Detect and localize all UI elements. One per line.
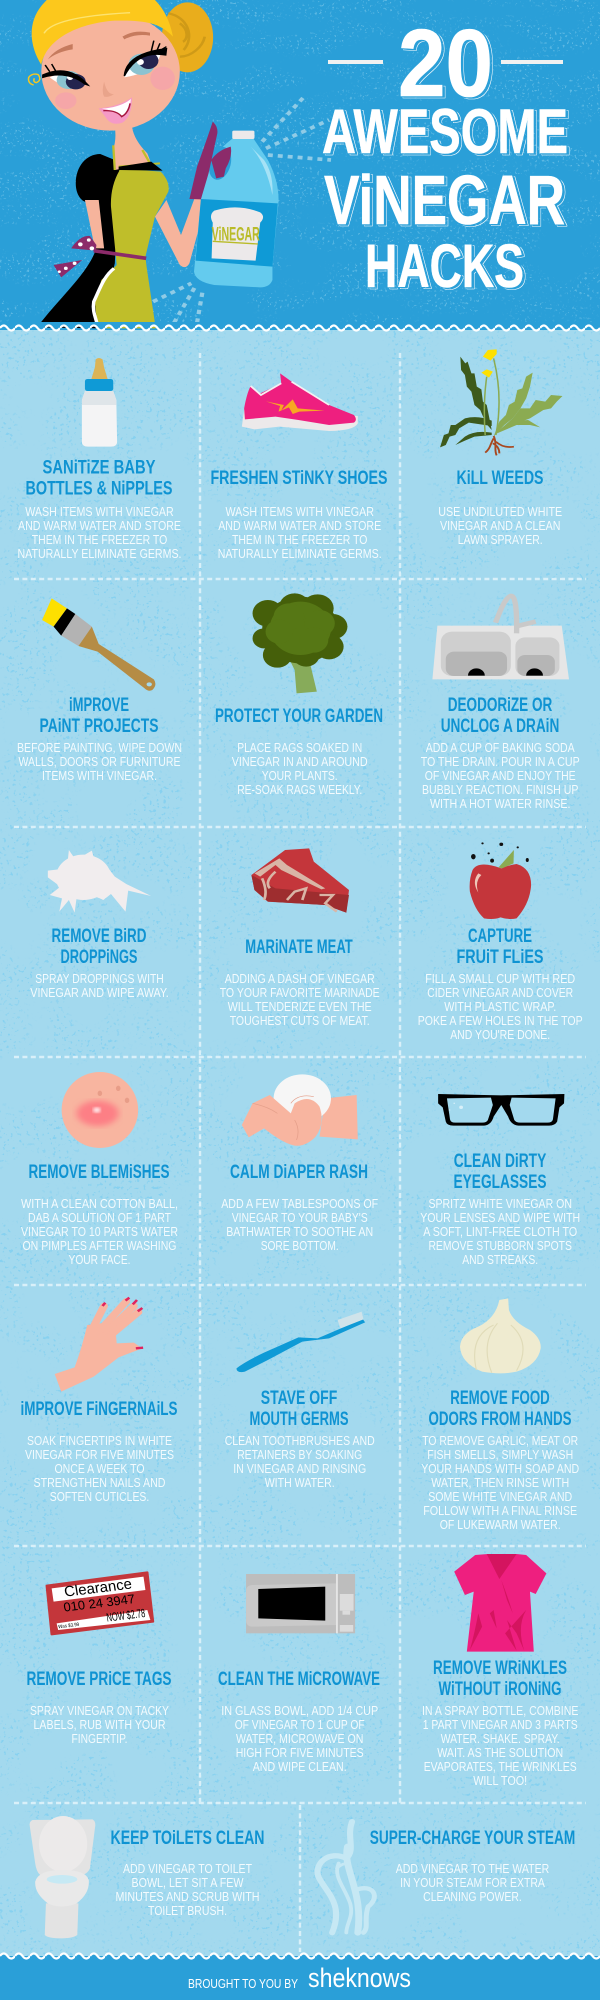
icon: clearance price tag: [47, 1572, 153, 1634]
icon: baby in diaper: [242, 1074, 358, 1146]
body text: OF VINEGAR AND ENJOY THE: [425, 769, 576, 783]
heading: iMPROVE: [69, 695, 129, 716]
panel: freshen stinky shoes: [210, 373, 388, 561]
bow: [54, 236, 96, 277]
heading: FRESHEN STiNKY SHOES: [210, 468, 388, 489]
title word: hacks: HACKS: [365, 232, 524, 300]
heading: PAiNT PROJECTS: [40, 716, 158, 737]
icon: microwave: [246, 1574, 355, 1633]
icon: steam wisps: [318, 1822, 374, 1933]
body text: SOME WHITE VINEGAR AND: [428, 1490, 572, 1504]
icon: white splat: [48, 850, 151, 913]
body text: THEM IN THE FREEZER TO: [232, 533, 368, 547]
tag text: 010 24 3947: [63, 1592, 136, 1614]
heading: [428, 1388, 572, 1430]
body text: [221, 1704, 378, 1774]
tag text: NOW $2.78: [105, 1606, 146, 1624]
body text: AND WARM WATER AND STORE: [218, 519, 381, 533]
heading: REMOVE FOOD: [450, 1388, 550, 1409]
body text: VINEGAR IN AND AROUND: [232, 755, 368, 769]
body text: MINUTES AND SCRUB WITH: [116, 1890, 260, 1904]
body text: WATER. SHAKE. SPRAY.: [441, 1732, 560, 1746]
body text: [17, 741, 182, 783]
icon: hand with red nails: [55, 1298, 143, 1392]
body text: VINEGAR TO 10 PARTS WATER: [21, 1225, 178, 1239]
body text: A SOFT, LINT-FREE CLOTH TO: [423, 1225, 577, 1239]
body text: LAWN SPRAYER.: [458, 533, 543, 547]
body text: IN YOUR STEAM FOR EXTRA: [400, 1876, 545, 1890]
heading: iMPROVE FiNGERNAiLS: [20, 1399, 178, 1420]
bottle handle: [206, 145, 234, 182]
panel: super-charge your steam: [318, 1822, 575, 1933]
top wave divider: [0, 322, 600, 334]
apron straps and neckline: [113, 145, 160, 170]
body text: [18, 505, 182, 561]
neck and chest: [113, 127, 151, 170]
eyebrows: [48, 32, 150, 59]
body text: ADD VINEGAR TO THE WATER: [396, 1862, 549, 1876]
body text: WATER, THEN RINSE WITH: [431, 1476, 569, 1490]
body text: IN GLASS BOWL, ADD 1/4 CUP: [221, 1704, 378, 1718]
heading: KEEP TOiLETS CLEAN: [110, 1828, 264, 1849]
body text: BEFORE PAINTING, WIPE DOWN: [17, 741, 182, 755]
heading: FRUiT FLiES: [456, 947, 544, 968]
body text: IN VINEGAR AND RINSING: [233, 1462, 366, 1476]
icon: pink wrinkled shirt: [454, 1554, 546, 1652]
body text: ITEMS WITH VINEGAR.: [42, 769, 157, 783]
body text: WILL TENDERIZE EVEN THE: [228, 1000, 372, 1014]
panel: calm diaper rash: [221, 1074, 379, 1253]
body text: STRENGTHEN NAILS AND: [34, 1476, 166, 1490]
body text: WITH WATER.: [265, 1476, 335, 1490]
panel: kill weeds: [438, 349, 562, 547]
body text: ADD VINEGAR TO TOILET: [123, 1862, 252, 1876]
apron neckline: [119, 162, 163, 171]
body text: [21, 1197, 178, 1267]
body text: SPRAY DROPPINGS WITH: [35, 972, 164, 986]
body text: TOILET BRUSH.: [148, 1904, 227, 1918]
icon: kitchen sink: [432, 596, 569, 679]
body text: NATURALLY ELIMINATE GERMS.: [18, 547, 182, 561]
panel: clean the microwave: [218, 1574, 380, 1774]
background: header speckle texture: [0, 0, 600, 328]
body text: ADDING A DASH OF VINEGAR: [225, 972, 375, 986]
heading: [433, 1658, 567, 1700]
left eye: [43, 64, 88, 89]
body text: RETAINERS BY SOAKING: [237, 1448, 362, 1462]
body text: CIDER VINEGAR AND COVER: [427, 986, 573, 1000]
icon: garlic bulb: [460, 1298, 541, 1373]
body text: WILL TOO!: [473, 1774, 527, 1788]
body text: WAIT. AS THE SOLUTION: [437, 1746, 563, 1760]
face: [41, 13, 180, 131]
cheeks: [150, 67, 175, 90]
panel: remove blemishes: [21, 1072, 178, 1267]
icon: red apple with flies: [470, 842, 531, 919]
heading: CLEAN THE MiCROWAVE: [218, 1669, 380, 1690]
bottle cap: [232, 131, 254, 139]
tag text: [58, 1576, 146, 1630]
panel: remove bird droppings: [30, 850, 169, 1000]
body text: SOAK FINGERTIPS IN WHITE: [27, 1434, 172, 1448]
hair: [32, 0, 173, 65]
icon: skin blemish: [62, 1072, 138, 1148]
panel: improve fingernails: [20, 1298, 178, 1504]
fingers: [92, 1301, 139, 1335]
hair bun: [162, 2, 213, 72]
bottle body: [194, 138, 279, 287]
body text: [396, 1862, 549, 1904]
body text: AND STREAKS.: [462, 1253, 538, 1267]
body text: [421, 741, 580, 811]
hair highlight: [44, 13, 130, 33]
body text: WITH A HOT WATER RINSE.: [430, 797, 570, 811]
panel: keep toilets clean: [30, 1816, 265, 1938]
panel: deodorize or unclog a drain: [421, 596, 580, 811]
vinegar bottle: [194, 131, 279, 287]
tag text: Clearance: [63, 1576, 133, 1600]
bottom wave divider: [0, 1950, 600, 1962]
panel: remove wrinkles without ironing: [422, 1554, 578, 1788]
heading: [52, 926, 146, 968]
heading: BOTTLES & NiPPLES: [26, 478, 172, 500]
body text: [421, 1434, 579, 1532]
body text: ON PIMPLES AFTER WASHING: [22, 1239, 176, 1253]
body text: [218, 505, 382, 561]
palm: [55, 1322, 142, 1392]
earring: [29, 74, 40, 85]
body text: RE-SOAK RAGS WEEKLY.: [237, 783, 362, 797]
body text: [225, 1434, 375, 1490]
mouth: [99, 97, 132, 124]
panel: protect your garden: [215, 593, 383, 797]
heading: MOUTH GERMS: [250, 1409, 348, 1430]
body text: YOUR PLANTS.: [262, 769, 338, 783]
body text: BOWL, LET SIT A FEW: [132, 1876, 244, 1890]
body text: AND WIPE CLEAN.: [253, 1760, 347, 1774]
heading: [250, 1388, 348, 1430]
panel: remove price tags: [26, 1572, 172, 1746]
grid dividers: [14, 353, 586, 1952]
heading: [26, 458, 172, 500]
panel: capture fruit flies: [418, 842, 583, 1042]
body text: ADD A CUP OF BAKING SODA: [426, 741, 575, 755]
body text: TOUGHEST CUTS OF MEAT.: [230, 1014, 370, 1028]
heading: [454, 1151, 547, 1193]
heading: CAPTURE: [468, 926, 532, 947]
heading: REMOVE BiRD: [52, 926, 146, 947]
illustration: woman holding vinegar bottle: [29, 0, 331, 328]
icon: toothbrush: [236, 1312, 365, 1372]
nails: [103, 1298, 143, 1348]
body text: AND WARM WATER AND STORE: [18, 519, 181, 533]
body text: [25, 1434, 174, 1504]
body text: BATHWATER TO SOOTHE AN: [226, 1225, 373, 1239]
body text: [221, 1197, 379, 1253]
background: blue header: [0, 0, 600, 330]
body text: VINEGAR FOR FIVE MINUTES: [25, 1448, 174, 1462]
body text: VINEGAR AND A CLEAN: [440, 519, 560, 533]
body text: CLEAN TOOTHBRUSHES AND: [225, 1434, 375, 1448]
heading: DEODORiZE OR: [448, 695, 552, 716]
background: blue footer: [0, 1956, 600, 2000]
panel: stave off mouth germs: [225, 1312, 375, 1490]
body text: ADD A FEW TABLESPOONS OF: [221, 1197, 379, 1211]
heading: KiLL WEEDS: [456, 468, 544, 489]
panel: sanitize baby bottles: [18, 358, 182, 561]
body text: SPRITZ WHITE VINEGAR ON: [428, 1197, 572, 1211]
icon: dandelion weed: [440, 349, 562, 455]
body text: NATURALLY ELIMINATE GERMS.: [218, 547, 382, 561]
body text: OF LUKEWARM WATER.: [440, 1518, 561, 1532]
heading: PROTECT YOUR GARDEN: [215, 706, 383, 727]
icon: broccoli: [253, 593, 347, 693]
nose: [103, 82, 114, 97]
title rule left: [328, 60, 383, 64]
body text: AND YOU'RE DONE.: [450, 1028, 550, 1042]
body text: SOFTEN CUTICLES.: [50, 1490, 149, 1504]
apron ruffle: [93, 268, 114, 328]
body text: VINEGAR TO YOUR BABY'S: [232, 1211, 368, 1225]
heading: [456, 926, 544, 968]
icon: toilet: [30, 1816, 95, 1938]
body text: [418, 972, 583, 1042]
arms: [85, 197, 207, 267]
body text: WATER, MICROWAVE ON: [236, 1732, 363, 1746]
panel: remove food odors from hands: [421, 1298, 579, 1532]
heading: CALM DiAPER RASH: [230, 1162, 368, 1183]
vinegar bottle: ViNEGAR: [212, 224, 260, 245]
bottle label: [211, 207, 263, 261]
title number: 20: [398, 10, 493, 117]
body text: WITH A CLEAN COTTON BALL,: [21, 1197, 178, 1211]
heading: CLEAN DiRTY: [454, 1151, 547, 1172]
footer logo: sheknows: [308, 1963, 411, 1993]
body text: WASH ITEMS WITH VINEGAR: [25, 505, 174, 519]
body text: FISH SMELLS, SIMPLY WASH: [427, 1448, 573, 1462]
heading: MARiNATE MEAT: [245, 937, 353, 958]
body text: REMOVE STUBBORN SPOTS: [428, 1239, 572, 1253]
body text: [422, 1704, 578, 1788]
heading: REMOVE BLEMiSHES: [28, 1162, 170, 1183]
bottle highlight: [251, 147, 273, 195]
body text: [30, 1704, 170, 1746]
body text: [420, 1197, 580, 1267]
title: [322, 10, 568, 300]
heading: [40, 695, 158, 737]
body text: USE UNDILUTED WHITE: [438, 505, 562, 519]
body text: [116, 1862, 260, 1918]
body text: [438, 505, 562, 547]
body text: HIGH FOR FIVE MINUTES: [236, 1746, 364, 1760]
heading: EYEGLASSES: [454, 1172, 546, 1193]
body text: WITH PLASTIC WRAP.: [444, 1000, 556, 1014]
body text: ONCE A WEEK TO: [54, 1462, 145, 1476]
body text: [30, 972, 169, 1000]
body text: VINEGAR AND WIPE AWAY.: [30, 986, 169, 1000]
heading: [441, 695, 559, 737]
title rule right: [501, 60, 563, 64]
body text: PLACE RAGS SOAKED IN: [237, 741, 362, 755]
body text: CLEANING POWER.: [423, 1890, 522, 1904]
icon: baby bottle: [82, 358, 117, 447]
right eye: [124, 41, 166, 77]
apron: [95, 168, 169, 328]
dress: [37, 154, 119, 328]
body text: THEM IN THE FREEZER TO: [32, 533, 167, 547]
bottle band: [196, 199, 278, 267]
spray dashes: [153, 97, 331, 323]
body text: SORE BOTTOM.: [261, 1239, 339, 1253]
body text: TO YOUR FAVORITE MARINADE: [220, 986, 380, 1000]
footer credit: [188, 1963, 411, 1993]
belt: [94, 251, 146, 258]
body text: FINGERTIP.: [72, 1732, 128, 1746]
body text: FOLLOW WITH A FINAL RINSE: [423, 1504, 577, 1518]
body text: SPRAY VINEGAR ON TACKY: [30, 1704, 170, 1718]
icon: steak: [251, 848, 349, 913]
icon: paint brush: [42, 598, 155, 691]
icon: pink sneaker: [242, 373, 358, 431]
body text: OF VINEGAR TO 1 CUP OF: [235, 1718, 365, 1732]
body text: [220, 972, 380, 1028]
footer label: BROUGHT TO YOU BY: [188, 1977, 299, 1991]
heading: DROPPiNGS: [60, 947, 138, 968]
body text: YOUR FACE.: [68, 1253, 130, 1267]
glove: [189, 122, 231, 199]
body text: WALLS, DOORS OR FURNITURE: [18, 755, 180, 769]
panel: marinate meat: [220, 848, 380, 1028]
heading: SANiTiZE BABY: [42, 458, 156, 478]
icon: black eyeglasses: [438, 1094, 564, 1126]
body text: [232, 741, 368, 797]
body text: WASH ITEMS WITH VINEGAR: [225, 505, 374, 519]
tag text: Was $3.99: [58, 1622, 80, 1630]
body text: FILL A SMALL CUP WITH RED: [425, 972, 575, 986]
heading: STAVE OFF: [261, 1388, 337, 1409]
panel: clean dirty eyeglasses: [420, 1094, 580, 1267]
heading: REMOVE PRiCE TAGS: [26, 1669, 172, 1690]
panel: improve paint projects: [17, 598, 182, 783]
body text: LABELS, RUB WITH YOUR: [34, 1718, 166, 1732]
body text: DAB A SOLUTION OF 1 PART: [28, 1211, 171, 1225]
